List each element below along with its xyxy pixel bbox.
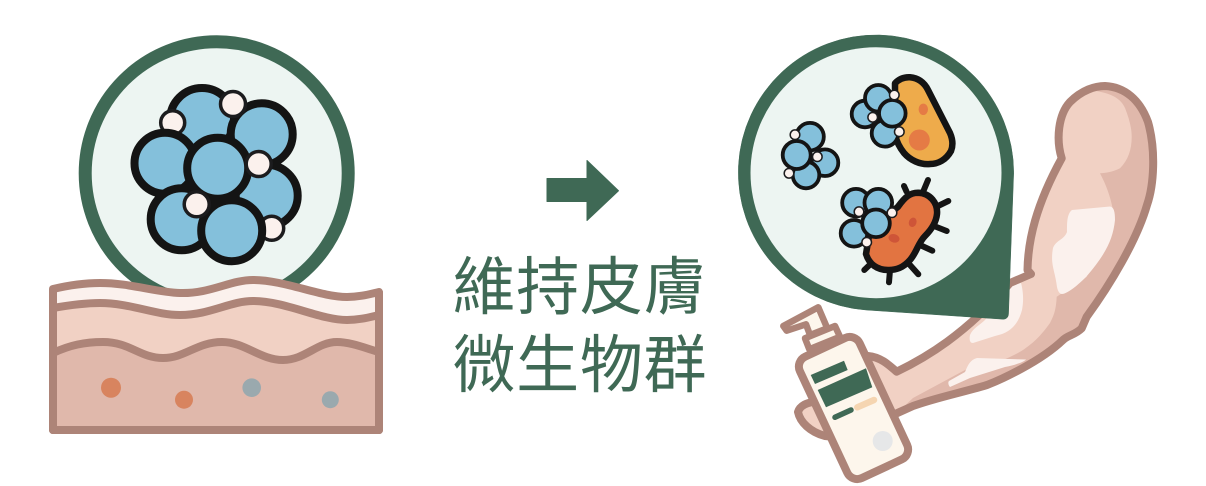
title: 維持皮膚 [452, 253, 706, 323]
magnifier circle: balanced microbes [85, 42, 348, 305]
microbe cluster: blue cocci with white dots [134, 88, 298, 261]
label: green pill [835, 410, 851, 417]
arrow [547, 160, 618, 220]
magnifier callout: imbalanced microbes [738, 35, 1014, 319]
label: grey dot [873, 431, 893, 451]
microbe: red spiky bacterium with blue cluster [841, 180, 948, 282]
label: large green bar [818, 368, 872, 407]
lotion bottle [783, 307, 912, 483]
microbe: yellow bacterium with blue cluster [852, 77, 952, 164]
pump head [783, 307, 827, 335]
microbe cluster: blue only [783, 123, 838, 188]
bottle body [795, 333, 912, 483]
label: small green bar [811, 361, 848, 384]
callout inner circle [750, 47, 1002, 298]
skin cross-section [53, 280, 379, 430]
label: peach pill [857, 400, 874, 407]
callout bubble [738, 35, 1014, 319]
illustration: arm with lotion bottle [783, 60, 1170, 483]
panel: healthy skin with microbiome [53, 42, 379, 430]
title [452, 253, 706, 401]
title: 微生物群 [452, 331, 706, 401]
arm [798, 60, 1170, 437]
collar [805, 326, 840, 349]
